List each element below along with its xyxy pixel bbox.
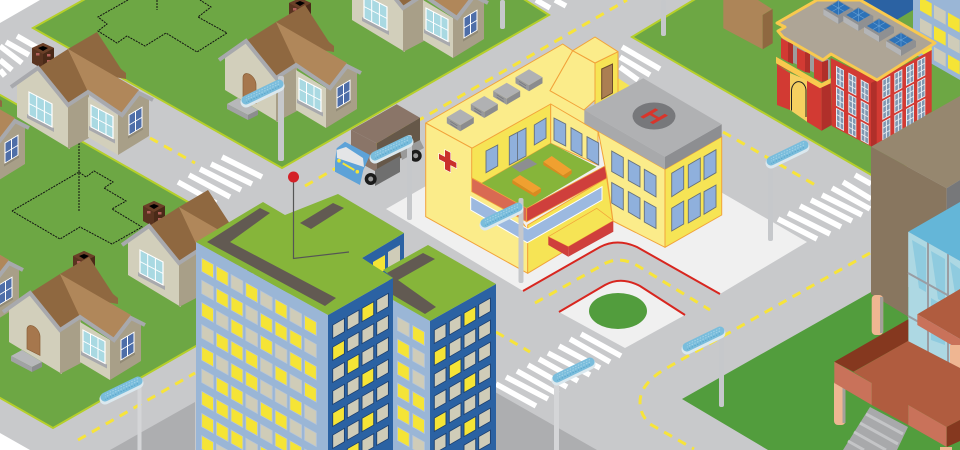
portico bbox=[776, 35, 832, 131]
crosswalk: top centre bbox=[536, 0, 660, 80]
apartment tower: right block bbox=[383, 245, 496, 450]
main block right face bbox=[665, 137, 722, 247]
red brick building bbox=[776, 0, 935, 147]
island with tree bbox=[559, 281, 685, 348]
main block left face bbox=[584, 123, 665, 247]
left face windows bbox=[398, 317, 424, 450]
roof bbox=[196, 194, 404, 315]
shadow under towers, left bbox=[110, 402, 195, 450]
terracotta deck bbox=[834, 319, 960, 450]
right face bbox=[328, 278, 393, 450]
crosswalk: top left bbox=[0, 36, 38, 76]
street lamp: lower right bbox=[687, 328, 724, 407]
courtyard right wall bbox=[551, 104, 598, 165]
planter 1 bbox=[543, 156, 572, 178]
house: top left bbox=[11, 32, 153, 155]
roof strip bbox=[387, 253, 436, 314]
apartment tower: left block bbox=[196, 172, 404, 450]
shadow under towers, right bbox=[495, 392, 597, 450]
tower 2: rear roof block bbox=[362, 233, 404, 285]
street lamp: right street bbox=[768, 142, 804, 241]
hospital plaza bbox=[386, 100, 807, 294]
house: far left lower bbox=[0, 202, 23, 325]
right face windows bbox=[333, 293, 388, 450]
white corner bottom left bbox=[0, 433, 30, 450]
right wall bbox=[872, 50, 932, 147]
crosswalk: right street bbox=[778, 175, 871, 239]
lamp: lower left bbox=[105, 378, 142, 450]
lamp pole: top right bbox=[661, 0, 666, 36]
street lamp: top centre house bbox=[246, 76, 284, 161]
left face bbox=[196, 242, 328, 450]
house: top edge bbox=[346, 0, 488, 58]
hospital bbox=[426, 37, 722, 273]
glass building bbox=[908, 202, 960, 400]
terracotta canopy upper bbox=[917, 289, 960, 375]
red cross bbox=[439, 146, 457, 176]
street lamp: hospital bbox=[485, 198, 524, 283]
elevator tower bbox=[550, 37, 630, 112]
post front left bbox=[834, 380, 846, 425]
main block windows right bbox=[672, 150, 716, 231]
lamp pole: top centre bbox=[500, 0, 505, 29]
roof bbox=[777, 0, 935, 80]
rooftop units bbox=[447, 69, 542, 131]
helipad roof bbox=[584, 78, 722, 169]
right face windows bbox=[434, 298, 490, 450]
antenna bbox=[288, 172, 349, 258]
courtyard patch bbox=[512, 158, 537, 172]
right face bbox=[430, 284, 496, 450]
helipad roof: H bbox=[634, 105, 674, 128]
right windows bbox=[882, 56, 925, 141]
left windows bbox=[836, 66, 869, 145]
lawn: left block bbox=[0, 92, 318, 428]
front wall bbox=[528, 178, 613, 273]
left wall bbox=[831, 58, 877, 147]
roof strips bbox=[207, 203, 344, 306]
courtyard windows bbox=[486, 118, 599, 173]
house: lower left bbox=[3, 251, 145, 380]
top right tower bbox=[850, 0, 960, 80]
blue glazing band bbox=[471, 187, 602, 243]
white corner top left bbox=[0, 0, 40, 23]
truck bbox=[335, 104, 424, 186]
crosswalk: lower left street bbox=[178, 157, 262, 203]
courtyard parapet left bbox=[472, 178, 527, 222]
dotted plan: top lot bbox=[98, 0, 227, 52]
brown box top bbox=[723, 0, 773, 49]
street lamp: truck bbox=[375, 135, 412, 220]
left face windows bbox=[202, 258, 316, 450]
post under brown tower bbox=[872, 295, 883, 335]
street lamp: bottom centre bbox=[554, 360, 590, 450]
left wall bbox=[426, 123, 528, 273]
house: top centre bbox=[219, 0, 361, 128]
dotted plan: left lot bbox=[12, 143, 142, 244]
solar panels bbox=[823, 0, 916, 56]
house: behind tower bbox=[122, 190, 264, 313]
crosswalk: bottom centre bbox=[496, 334, 621, 406]
left face bbox=[393, 298, 430, 450]
courtyard lawn bbox=[482, 143, 597, 208]
stairs bbox=[843, 407, 908, 450]
roof plane bbox=[426, 44, 590, 148]
brown tower right bbox=[871, 96, 960, 317]
planter 2 bbox=[512, 175, 541, 197]
house: far left upper bbox=[0, 60, 29, 183]
red drive curb bbox=[523, 242, 720, 294]
main block windows left bbox=[612, 151, 656, 228]
courtyard left wall bbox=[472, 104, 551, 183]
corner shade bbox=[871, 80, 877, 147]
roof bbox=[383, 245, 496, 321]
courtyard parapet right bbox=[527, 165, 607, 222]
lawn: top right block bbox=[632, 0, 960, 180]
entrance canopy bbox=[548, 208, 613, 257]
lawn: bottom right block bbox=[682, 287, 960, 450]
lawn: top left block bbox=[33, 0, 549, 168]
